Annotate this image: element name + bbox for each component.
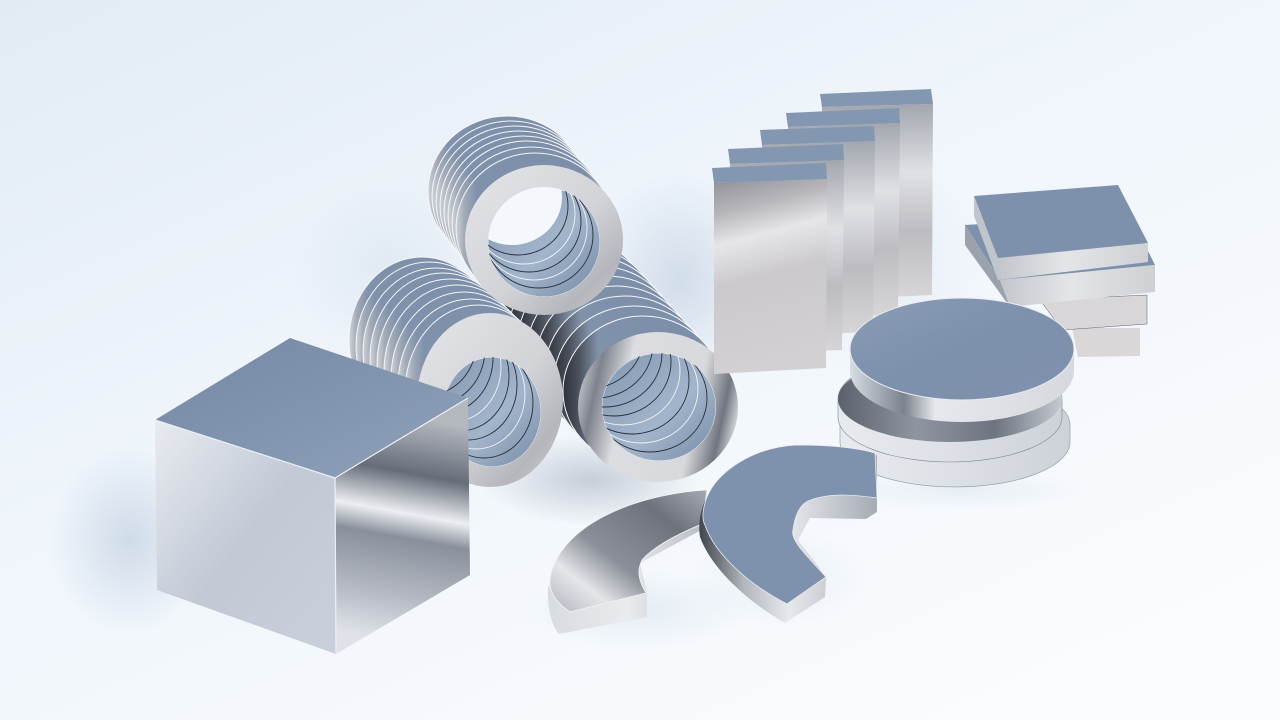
bottom disc — [840, 380, 1070, 487]
left arc magnet — [548, 490, 707, 634]
plate 1 — [974, 185, 1148, 280]
plate 3 — [760, 126, 875, 336]
top disc face — [850, 298, 1074, 400]
top disc — [850, 298, 1074, 422]
disc stack — [838, 298, 1074, 487]
right ring face — [578, 332, 738, 482]
plate 2 — [965, 215, 1155, 307]
top ring stack — [428, 116, 623, 315]
right ring hole — [602, 353, 716, 461]
plate 3 — [1040, 295, 1147, 330]
left ring face — [417, 313, 563, 487]
plate 1 front — [712, 163, 827, 374]
top ring face — [465, 165, 623, 315]
metal cube — [155, 338, 470, 654]
plate 4 — [786, 108, 900, 318]
plate 4 — [1072, 328, 1140, 357]
soft shadows — [50, 160, 1090, 650]
square plate stack — [965, 185, 1155, 357]
metal plates row — [712, 89, 933, 374]
right arc magnet — [699, 445, 877, 623]
top ring hole — [488, 187, 600, 297]
middle disc — [838, 354, 1062, 462]
left ring hole — [446, 357, 541, 467]
left ring stack — [349, 257, 563, 487]
plate 2 — [728, 144, 844, 354]
plate 5 — [820, 89, 933, 300]
right ring stack — [504, 254, 738, 482]
